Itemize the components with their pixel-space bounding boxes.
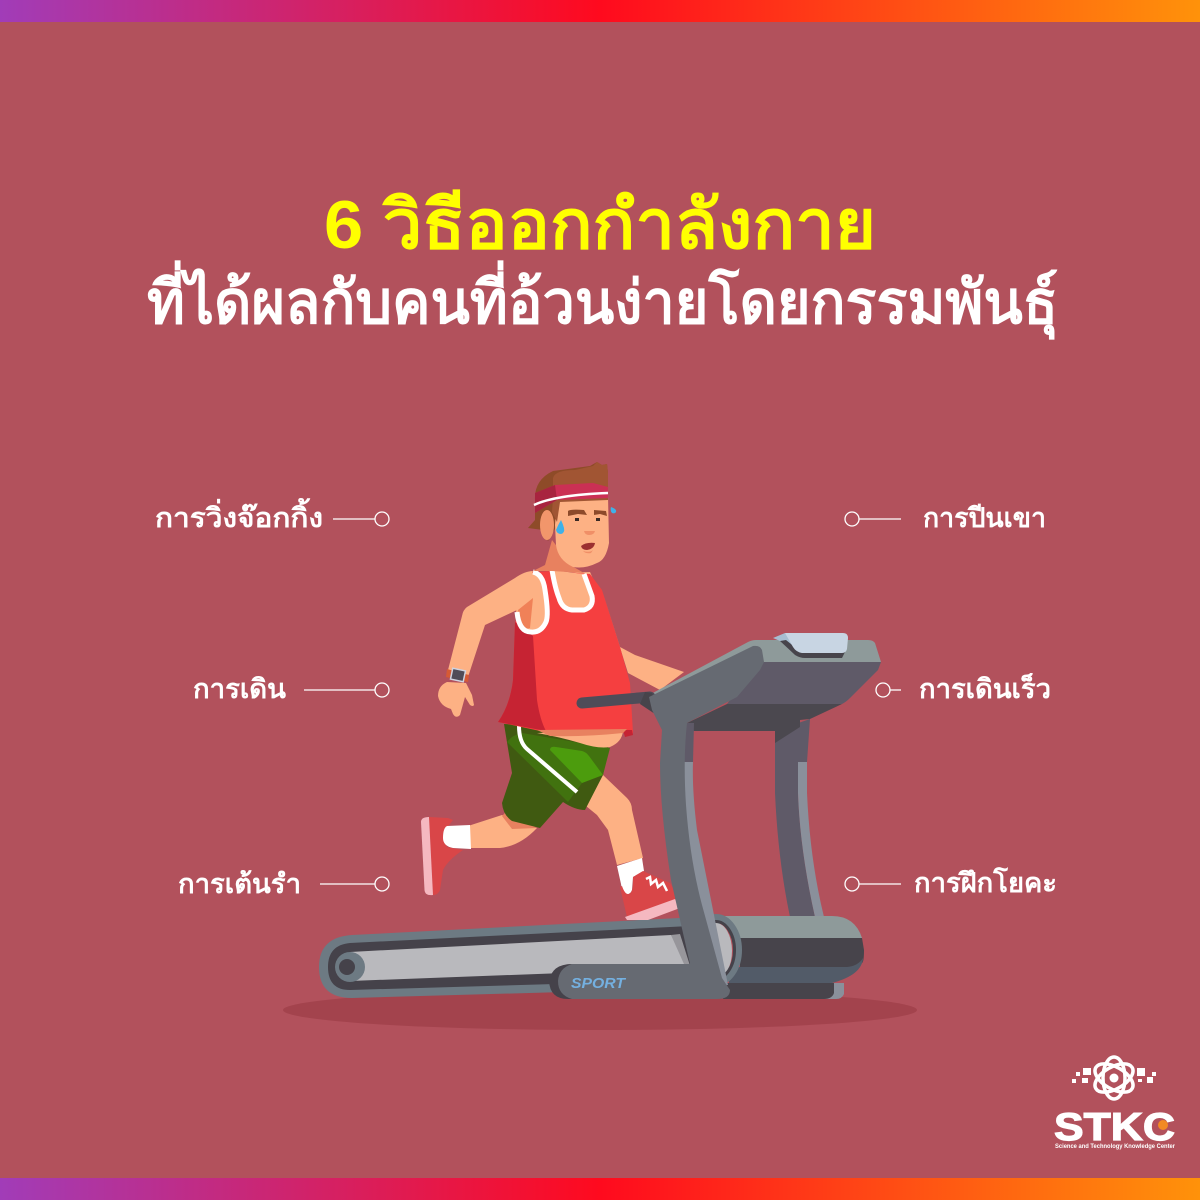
runner xyxy=(421,462,684,920)
handle bar xyxy=(582,697,650,703)
back sock xyxy=(443,825,471,849)
front arm and post xyxy=(556,646,764,999)
label jogging: การวิ่งจ๊อกกิ้ง xyxy=(155,497,323,533)
labels left xyxy=(155,497,389,899)
back shoe xyxy=(429,817,463,895)
brand label: SPORT xyxy=(571,975,627,992)
logo xyxy=(1054,1057,1176,1150)
label walking xyxy=(193,674,389,704)
label dancing xyxy=(178,869,389,899)
treadmill rear post xyxy=(775,719,824,917)
display shadow xyxy=(780,640,846,658)
console under shadow xyxy=(687,704,842,743)
eyebrows xyxy=(568,510,607,516)
logo pixels xyxy=(1072,1068,1156,1083)
label climbing: การปีนเขา xyxy=(923,503,1046,533)
label climbing xyxy=(845,503,1046,533)
treadmill deck xyxy=(319,916,864,999)
labels right xyxy=(845,503,1057,898)
front leg xyxy=(575,775,680,920)
head xyxy=(528,462,616,573)
front post strip xyxy=(684,723,694,762)
mouth xyxy=(581,543,595,550)
deck rear ring xyxy=(693,917,739,983)
logo wordmark: STKC xyxy=(1054,1106,1175,1149)
logo atom xyxy=(1090,1057,1138,1099)
arm opening xyxy=(516,572,547,632)
lower lip xyxy=(583,550,593,553)
base left accent xyxy=(549,964,572,999)
title line 1: 6 วิธีออกกำลังกาย xyxy=(324,187,876,263)
sweat drop left xyxy=(556,520,564,534)
front shoe xyxy=(620,871,680,917)
label dancing: การเต้นรำ xyxy=(178,869,301,899)
deck rail and belt xyxy=(319,917,720,998)
front sock xyxy=(617,858,644,894)
console top xyxy=(649,640,881,697)
hand xyxy=(438,682,474,717)
face xyxy=(555,496,609,568)
label brisk walking: การเดินเร็ว xyxy=(919,671,1051,704)
eyes xyxy=(575,518,600,521)
back hair xyxy=(528,462,608,541)
handle connector xyxy=(640,692,665,725)
motor hood xyxy=(711,916,864,999)
back leg xyxy=(421,812,537,895)
armpit shadow xyxy=(518,598,533,629)
watch strap xyxy=(446,669,469,682)
bottom gradient bar xyxy=(0,1178,1200,1200)
top gradient bar xyxy=(0,0,1200,22)
shorts xyxy=(502,724,610,828)
display screen xyxy=(785,633,848,653)
console face xyxy=(727,662,881,704)
nose xyxy=(584,531,595,535)
treadmill console and front post xyxy=(549,633,881,999)
display back xyxy=(773,633,840,658)
illustration shadow xyxy=(283,990,917,1030)
logo tagline: Science and Technology Knowledge Center xyxy=(1055,1144,1176,1150)
label brisk walking xyxy=(876,671,1051,704)
front post light xyxy=(684,762,728,985)
arm strap band xyxy=(517,572,547,632)
label yoga xyxy=(845,866,1057,898)
logo orange dot xyxy=(1158,1120,1168,1130)
label yoga: การฝึกโยคะ xyxy=(914,866,1057,898)
sweat drop right xyxy=(611,507,616,513)
label walking: การเดิน xyxy=(193,674,287,704)
title xyxy=(147,187,1058,340)
neck strap band xyxy=(552,570,592,610)
headband xyxy=(535,483,608,513)
front arm xyxy=(438,571,533,717)
belly xyxy=(537,731,623,748)
watch face xyxy=(450,668,466,682)
label jogging xyxy=(155,497,389,533)
neck opening xyxy=(552,570,592,610)
ear xyxy=(540,510,554,540)
tank top xyxy=(498,570,633,737)
neck xyxy=(533,540,584,573)
torso skin and back arm xyxy=(530,572,684,690)
headband stripe xyxy=(534,493,608,505)
title line 2: ที่ได้ผลกับคนที่อ้วนง่ายโดยกรรมพันธุ์ xyxy=(147,260,1058,340)
belly shadow xyxy=(537,729,627,736)
